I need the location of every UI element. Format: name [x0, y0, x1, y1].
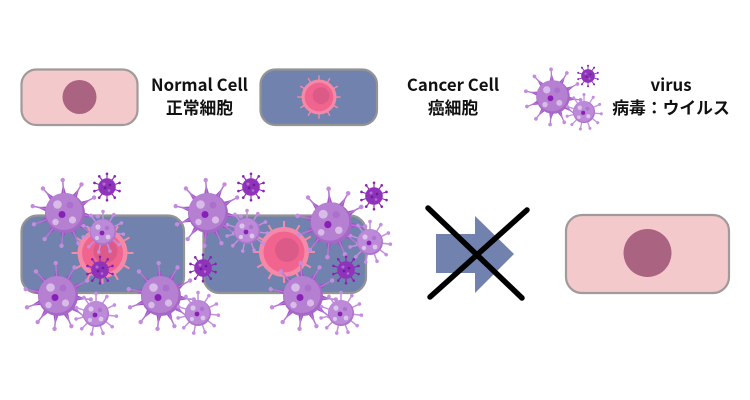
label: cancer cell [407, 72, 499, 119]
label: virus: virus [650, 72, 692, 96]
label: normal cell: Normal Cell [151, 72, 248, 96]
infected cancer cell: left [22, 216, 184, 293]
arrow [436, 216, 514, 293]
label: virus: 病毒：ウイルス [612, 95, 730, 119]
legend: cancer cell [260, 70, 377, 125]
infected cancer cell: right [204, 216, 366, 293]
nucleus [624, 229, 672, 277]
label: normal cell [151, 72, 248, 119]
viruses attacking cancer cells [23, 172, 392, 336]
cross mark [428, 208, 527, 298]
legend: normal cell [22, 70, 138, 125]
label: virus [612, 72, 730, 119]
label: cancer cell: 癌細胞 [428, 95, 478, 119]
cancer cell icon [297, 75, 341, 119]
nucleus [62, 80, 96, 114]
legend: virus icons [524, 65, 603, 131]
label: normal cell: 正常細胞 [166, 95, 233, 119]
label: cancer cell: Cancer Cell [407, 72, 499, 96]
result: normal cell [566, 215, 729, 293]
